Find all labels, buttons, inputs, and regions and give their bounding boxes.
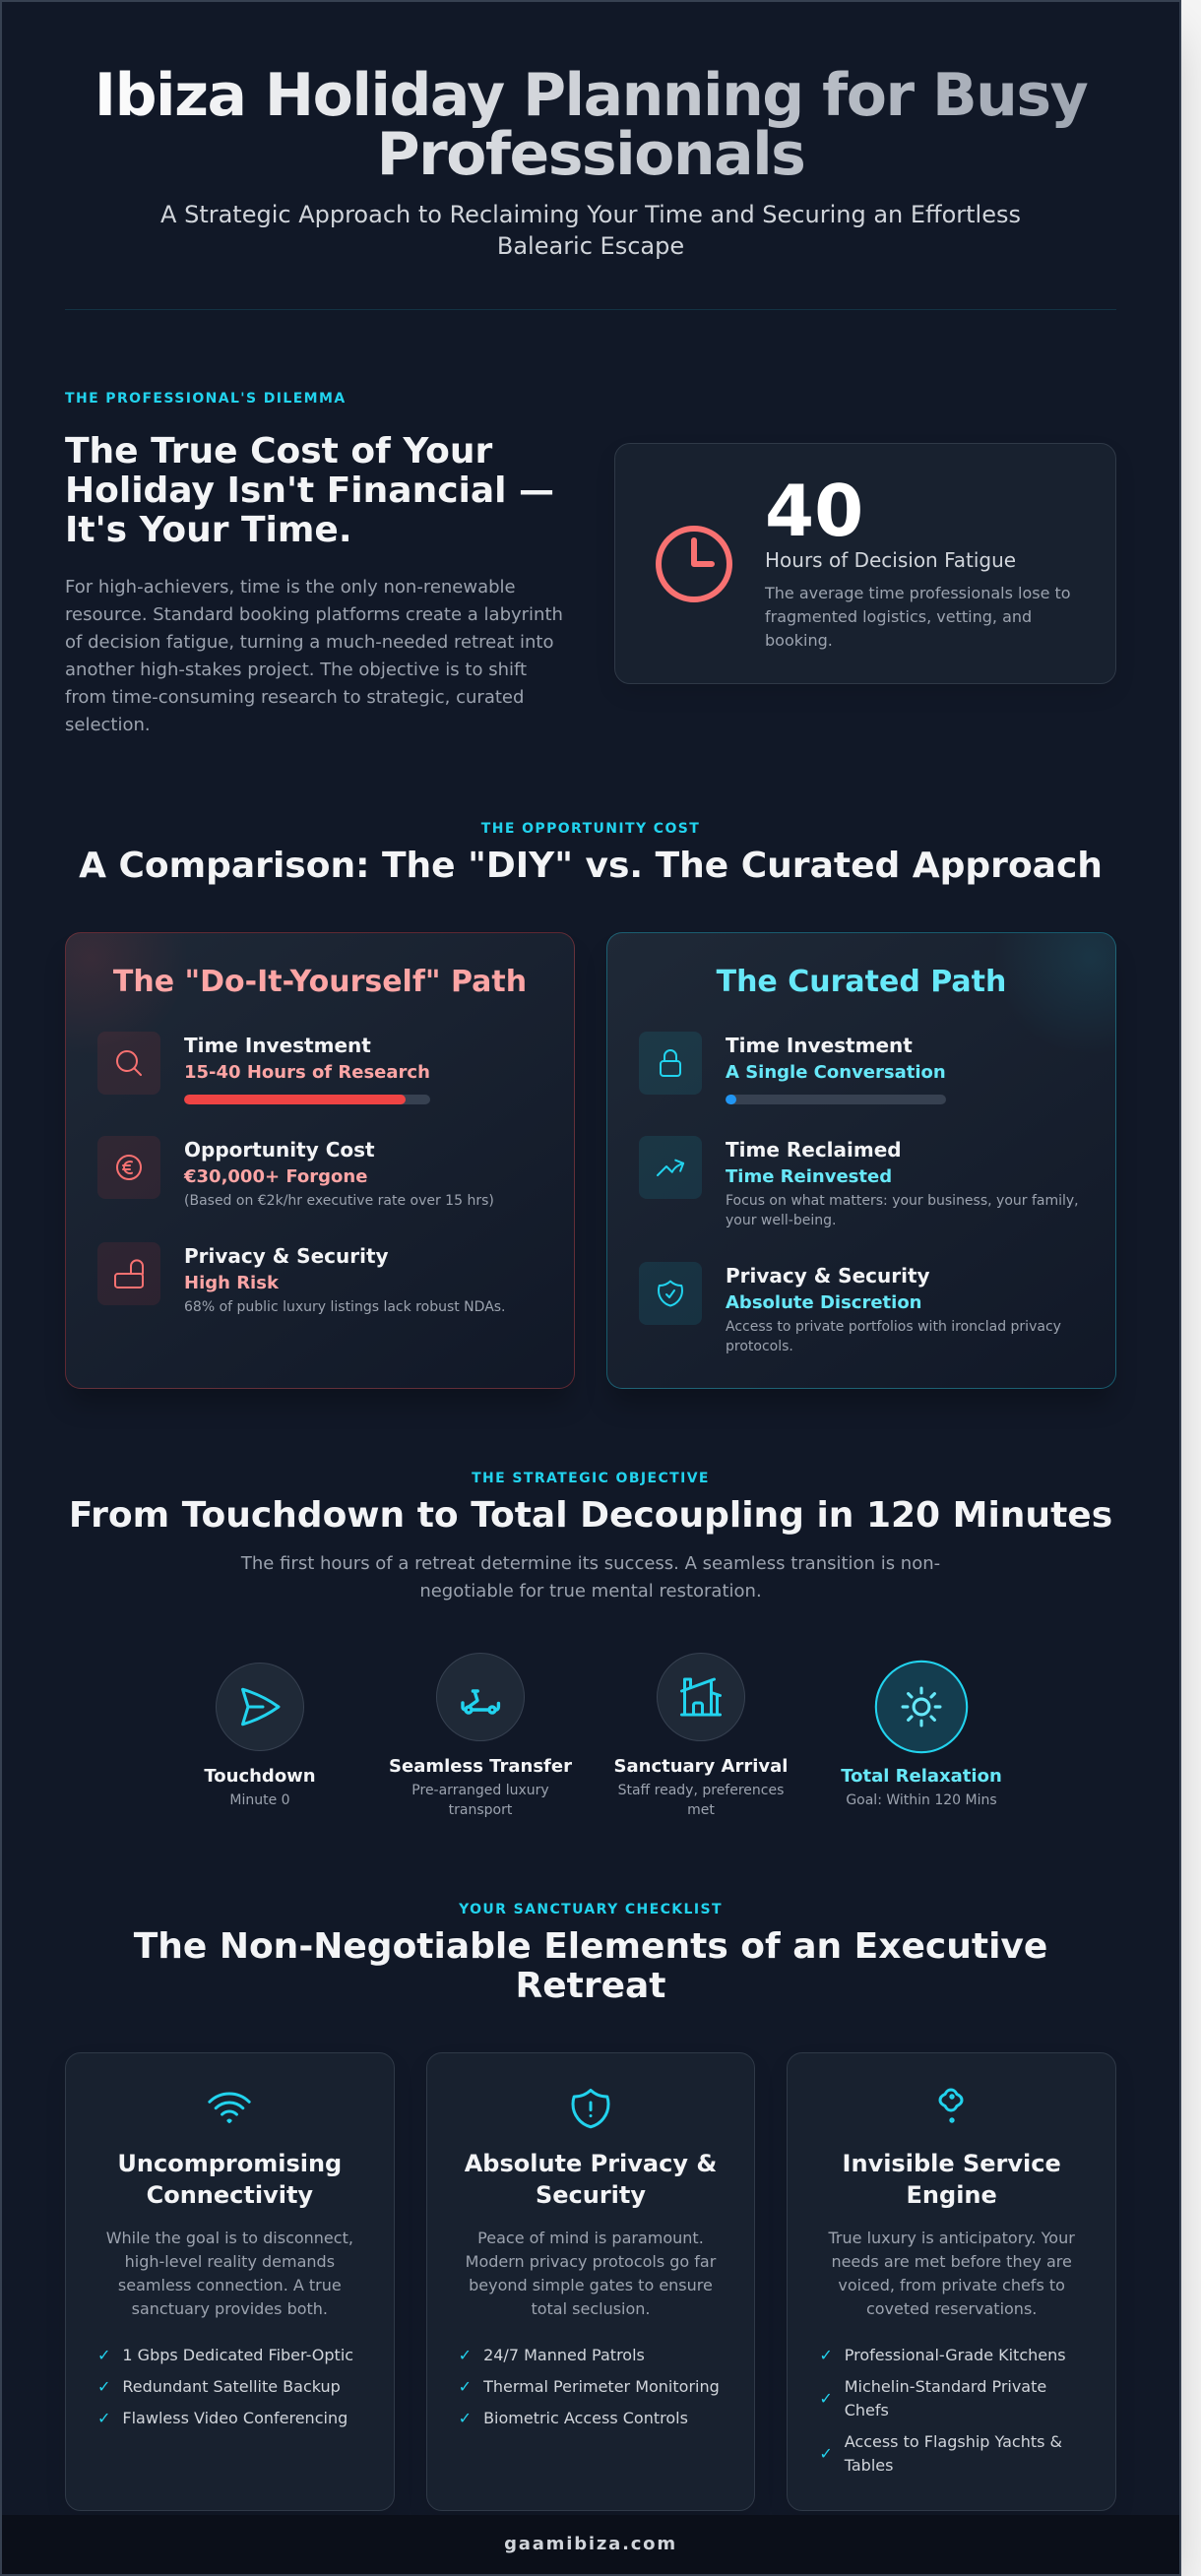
row text: 68% of public luxury listings lack robust NDAs.: [184, 1299, 506, 1315]
icon: search: [97, 1032, 160, 1095]
stat card: 40 hours: [614, 443, 1116, 684]
panel: curated path: [606, 932, 1116, 1389]
body text: of decision fatigue, turning a much-needed retreat into: [65, 632, 553, 653]
checklist: ✓: [819, 2389, 833, 2408]
row text: Time Investment: [184, 1034, 371, 1057]
card text: beyond simple gates to ensure: [469, 2276, 713, 2294]
row text: protocols.: [726, 1339, 793, 1354]
row text: €30,000+ Forgone: [184, 1166, 367, 1187]
row text: (Based on €2k/hr executive rate over 15 hrs): [184, 1193, 494, 1209]
card heading: Engine: [907, 2181, 997, 2209]
panel heading: The Curated Path: [717, 965, 1006, 999]
checklist: ✓: [819, 2346, 833, 2364]
intro text: negotiable for true mental restoration.: [419, 1581, 762, 1602]
icon: closed lock: [639, 1032, 702, 1095]
stat number: 40: [765, 469, 863, 551]
panel: service: [787, 2052, 1116, 2511]
card text: total seclusion.: [531, 2299, 650, 2318]
body text: [65, 577, 563, 735]
step: seamless transfer: transport: [449, 1802, 512, 1818]
step: seamless transfer: Seamless Transfer: [389, 1756, 572, 1777]
card heading: Absolute Privacy &: [465, 2150, 717, 2177]
step: sanctuary arrival: met: [687, 1802, 715, 1818]
row text: Time Reclaimed: [726, 1138, 902, 1162]
eyebrow: THE OPPORTUNITY COST: [481, 821, 700, 837]
panel: DIY path: [65, 932, 575, 1389]
heading: [65, 431, 554, 550]
header: title block: [95, 61, 1088, 260]
card text: [466, 2229, 717, 2318]
checklist: ✓: [459, 2409, 472, 2427]
card heading: [843, 2150, 1061, 2209]
row text: Privacy & Security: [726, 1264, 930, 1288]
row text: 15-40 Hours of Research: [184, 1062, 430, 1083]
card text: Modern privacy protocols go far: [466, 2252, 716, 2271]
panel: privacy: [426, 2052, 755, 2511]
card text: high-level reality demands: [125, 2252, 335, 2271]
checklist: Access to Flagship Yachts &: [845, 2432, 1062, 2451]
row text: Focus on what matters: your business, your family,: [726, 1193, 1079, 1209]
checklist: Thermal Perimeter Monitoring: [483, 2377, 720, 2396]
checklist: Flawless Video Conferencing: [122, 2409, 348, 2427]
row text: Access to private portfolios with ironclad privacy: [726, 1319, 1061, 1335]
checklist: ✓: [459, 2377, 472, 2396]
checklist: ✓: [459, 2346, 472, 2364]
card text: voiced, from private chefs to: [838, 2276, 1065, 2294]
section heading: strategic objective: [69, 1471, 1112, 1602]
body text: from time-consuming research to strategic, curated: [65, 687, 524, 708]
icon: clock: [656, 526, 732, 602]
icon: paper plane: [216, 1663, 304, 1751]
row text: Absolute Discretion: [726, 1292, 921, 1313]
row: time reclaimed: [639, 1136, 1079, 1228]
row: time investment: [639, 1032, 946, 1104]
row text: Privacy & Security: [184, 1244, 389, 1268]
row text: [184, 1244, 506, 1315]
checklist: ✓: [819, 2444, 833, 2463]
step: sanctuary arrival: Staff ready, preferences: [618, 1783, 784, 1798]
eyebrow: THE STRATEGIC OBJECTIVE: [472, 1471, 710, 1486]
timeline: [204, 1653, 1002, 1818]
row: opportunity cost: [97, 1136, 494, 1209]
title: Ibiza Holiday Planning for Busy: [95, 61, 1087, 130]
card text: coveted reservations.: [866, 2299, 1037, 2318]
checklist: 1 Gbps Dedicated Fiber-Optic: [122, 2346, 353, 2364]
checklist: Tables: [845, 2456, 893, 2475]
step: sanctuary arrival: Sanctuary Arrival: [614, 1756, 788, 1777]
step: touchdown: Touchdown: [204, 1766, 316, 1787]
title: Professionals: [377, 120, 804, 189]
heading: The True Cost of Your: [65, 431, 492, 471]
step: touchdown: Minute 0: [229, 1792, 290, 1808]
checklist: Michelin-Standard Private: [845, 2377, 1046, 2396]
intro text: The first hours of a retreat determine its success. A seamless transition is non-: [241, 1553, 940, 1574]
step: total relaxation: Goal: Within 120 Mins: [846, 1792, 997, 1808]
icon: shield alert: [571, 2089, 610, 2128]
card text: seamless connection. A true: [118, 2276, 342, 2294]
card text: While the goal is to disconnect,: [106, 2229, 353, 2247]
row text: [184, 1034, 430, 1104]
eyebrow: YOUR SANCTUARY CHECKLIST: [459, 1902, 723, 1917]
icon: modern home: [657, 1653, 745, 1741]
row: privacy and security: [97, 1242, 506, 1315]
card heading: Invisible Service: [843, 2150, 1061, 2177]
panel heading: The "Do-It-Yourself" Path: [113, 965, 527, 999]
checklist: Biometric Access Controls: [483, 2409, 688, 2427]
heading: [134, 1926, 1047, 2006]
progress bar: [726, 1095, 946, 1104]
card heading: Security: [536, 2181, 646, 2209]
heading: A Comparison: The "DIY" vs. The Curated Approach: [79, 846, 1103, 886]
heading: The Non-Negotiable Elements of an Executive: [134, 1926, 1047, 1967]
checklist: ✓: [97, 2346, 110, 2364]
row: privacy and security: [639, 1262, 1061, 1354]
step: touchdown: [204, 1663, 316, 1808]
row text: High Risk: [184, 1273, 279, 1293]
icon: sun: [875, 1661, 968, 1753]
body text: resource. Standard booking platforms create a labyrinth: [65, 604, 563, 625]
subtitle: A Strategic Approach to Reclaiming Your Time and Securing an Effortless: [160, 201, 1021, 228]
card text: needs are met before they are: [831, 2252, 1072, 2271]
footer: gaamibiza.com: [504, 2534, 677, 2554]
row: time investment: [97, 1032, 430, 1104]
icon: service shape: [939, 2089, 963, 2123]
icon: euro: [97, 1136, 160, 1199]
heading: From Touchdown to Total Decoupling in 120 Minutes: [69, 1495, 1112, 1536]
heading: Holiday Isn't Financial —: [65, 471, 554, 511]
section: the professional's dilemma: [65, 391, 563, 735]
stat label: Hours of Decision Fatigue: [765, 547, 1016, 571]
body text: another high-stakes project. The objective is to shift: [65, 660, 527, 680]
footer: [2, 2515, 1179, 2574]
row text: [183, 1138, 494, 1209]
row text: [726, 1264, 1061, 1354]
checklist: 24/7 Manned Patrols: [483, 2346, 645, 2364]
card heading: Uncompromising: [117, 2150, 342, 2177]
card text: [828, 2229, 1075, 2318]
icon: shield check: [639, 1262, 702, 1325]
checklist: ✓: [97, 2377, 110, 2396]
heading: It's Your Time.: [65, 510, 352, 550]
row text: Time Reinvested: [726, 1166, 892, 1187]
card heading: [117, 2150, 342, 2209]
card heading: [465, 2150, 717, 2209]
subtitle: Balearic Escape: [497, 232, 684, 260]
step: total relaxation: Total Relaxation: [841, 1766, 1002, 1787]
card text: Peace of mind is paramount.: [477, 2229, 704, 2247]
stat text: [764, 469, 1071, 650]
card text: True luxury is anticipatory. Your: [829, 2229, 1075, 2247]
row text: Opportunity Cost: [184, 1138, 375, 1162]
checklist: Professional-Grade Kitchens: [845, 2346, 1066, 2364]
checklist: Redundant Satellite Backup: [122, 2377, 341, 2396]
title: [65, 66, 1116, 184]
icon: scooter: [436, 1653, 525, 1741]
checklist: ✓: [97, 2409, 110, 2427]
section heading: opportunity cost: [79, 821, 1103, 886]
body text: For high-achievers, time is the only non-renewable: [65, 577, 516, 597]
row text: Time Investment: [726, 1034, 913, 1057]
step: total relaxation: [841, 1660, 1002, 1808]
icon: trending up: [639, 1136, 702, 1199]
panel: connectivity: [65, 2052, 395, 2511]
step: sanctuary arrival: [614, 1653, 788, 1818]
step: seamless transfer: Pre-arranged luxury: [411, 1783, 549, 1798]
subtitle: [160, 201, 1021, 260]
progress bar: [184, 1095, 430, 1104]
checklist: [819, 2344, 1084, 2478]
intro text: [240, 1553, 940, 1602]
icon: open lock: [97, 1242, 160, 1305]
card text: sanctuary provides both.: [132, 2299, 328, 2318]
card text: [106, 2229, 353, 2318]
stat description: The average time professionals lose to fragmented logistics, vetting, and booking.: [765, 583, 1071, 650]
checklist: Chefs: [845, 2401, 889, 2419]
row text: [726, 1034, 946, 1104]
step: seamless transfer: [389, 1653, 572, 1818]
row text: [726, 1138, 1079, 1228]
card heading: Connectivity: [147, 2181, 313, 2209]
body text: selection.: [65, 715, 151, 735]
row text: your well-being.: [726, 1213, 836, 1228]
heading: Retreat: [515, 1966, 666, 2006]
icon: wifi: [208, 2093, 251, 2124]
section heading: sanctuary checklist: [134, 1902, 1047, 2006]
checklist: [97, 2346, 353, 2427]
eyebrow: THE PROFESSIONAL'S DILEMMA: [65, 391, 347, 407]
row text: A Single Conversation: [726, 1062, 946, 1083]
checklist: [459, 2346, 720, 2427]
